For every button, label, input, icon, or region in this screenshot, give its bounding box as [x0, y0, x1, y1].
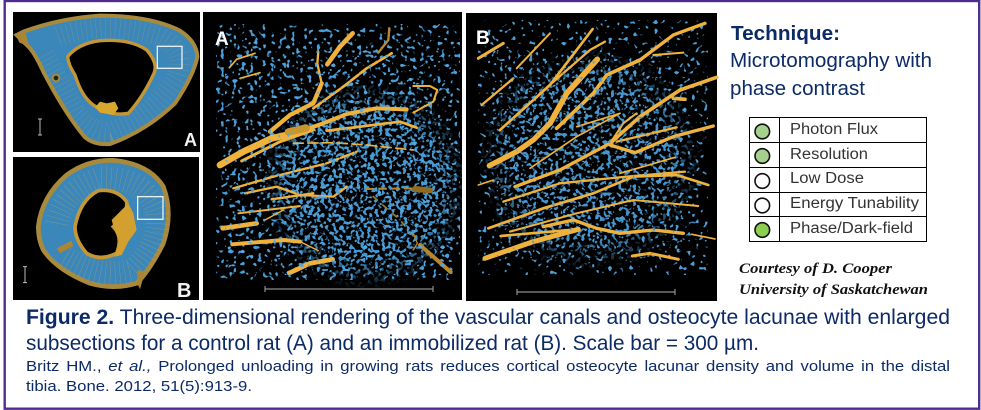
citation: tibia. Bone. 2012, 51(5):913-9.	[26, 378, 252, 395]
technique description	[730, 50, 932, 100]
bone A marrow cavity	[68, 40, 155, 114]
bone A trabecula	[95, 102, 118, 115]
table labels: Photon Flux	[790, 121, 878, 138]
bone B scale bar	[23, 267, 27, 283]
bone A left tip	[15, 31, 29, 47]
lacunae over vessels A	[225, 40, 455, 275]
capability table	[750, 118, 926, 242]
figure caption: subsections for a control rat (A) and an immobilized rat (B). Scale bar = 300 µm.	[26, 332, 759, 355]
rating: phase/dark-field	[755, 223, 770, 237]
figure caption: Figure 2. Three-dimensional rendering of the vascular canals and osteocyte lacunae with enlarged	[26, 306, 950, 329]
bone B label: B	[177, 280, 191, 302]
bone A canals	[43, 28, 179, 132]
citation: Britz HM., et al., Prolonged unloading in growing rats reduces cortical osteocyte lacunar density and volume in the distal	[26, 358, 950, 375]
courtesy credit	[739, 261, 928, 298]
panel B scale bar	[517, 289, 675, 295]
technique heading: Technique:	[731, 23, 840, 45]
vessels B	[478, 23, 717, 259]
lacunae over vessels B	[495, 50, 685, 260]
table labels: Energy Tunability	[790, 195, 919, 212]
table labels: Low Dose	[790, 170, 864, 187]
bone A label: A	[184, 130, 197, 150]
lacunae B dense	[480, 50, 700, 270]
courtesy credit: Courtesy of D. Cooper	[739, 261, 892, 277]
panel A scale bar	[265, 286, 433, 292]
table labels: Resolution	[790, 146, 868, 163]
bone B trabecula	[112, 203, 137, 257]
lacunae B sparse	[478, 20, 708, 275]
citation	[26, 358, 950, 395]
courtesy credit: University of Saskatchewan	[739, 282, 928, 298]
panel: bone cross-section A	[13, 12, 200, 152]
table labels: Phase/Dark-field	[790, 220, 913, 237]
technique description: Microtomography with	[730, 50, 932, 72]
lacunae A sparse	[216, 24, 460, 280]
rating: resolution	[755, 149, 770, 163]
bone B inset box	[138, 197, 163, 219]
panel: 3D render B	[466, 13, 717, 301]
bone A cortex	[17, 16, 197, 144]
bone B spur	[57, 241, 145, 289]
lacunae A dense	[262, 82, 462, 288]
panel A label: A	[215, 29, 229, 50]
bone A scale bar	[38, 119, 42, 135]
table labels	[790, 121, 919, 237]
panel: bone cross-section B	[13, 157, 199, 302]
panel: 3D render A	[203, 12, 462, 300]
bone B marrow cavity	[75, 190, 127, 257]
rating: low dose	[755, 174, 770, 188]
panel B label: B	[476, 28, 490, 49]
bone B cortex	[38, 160, 168, 287]
bone A inset box	[157, 46, 182, 68]
technique description: phase contrast	[730, 78, 865, 100]
bone A foramen	[53, 75, 59, 81]
rating: photon flux	[755, 124, 770, 139]
bone B canals	[57, 178, 157, 273]
vessels A	[220, 28, 451, 273]
rating: energy tunability	[755, 198, 770, 213]
figure caption	[26, 306, 950, 355]
